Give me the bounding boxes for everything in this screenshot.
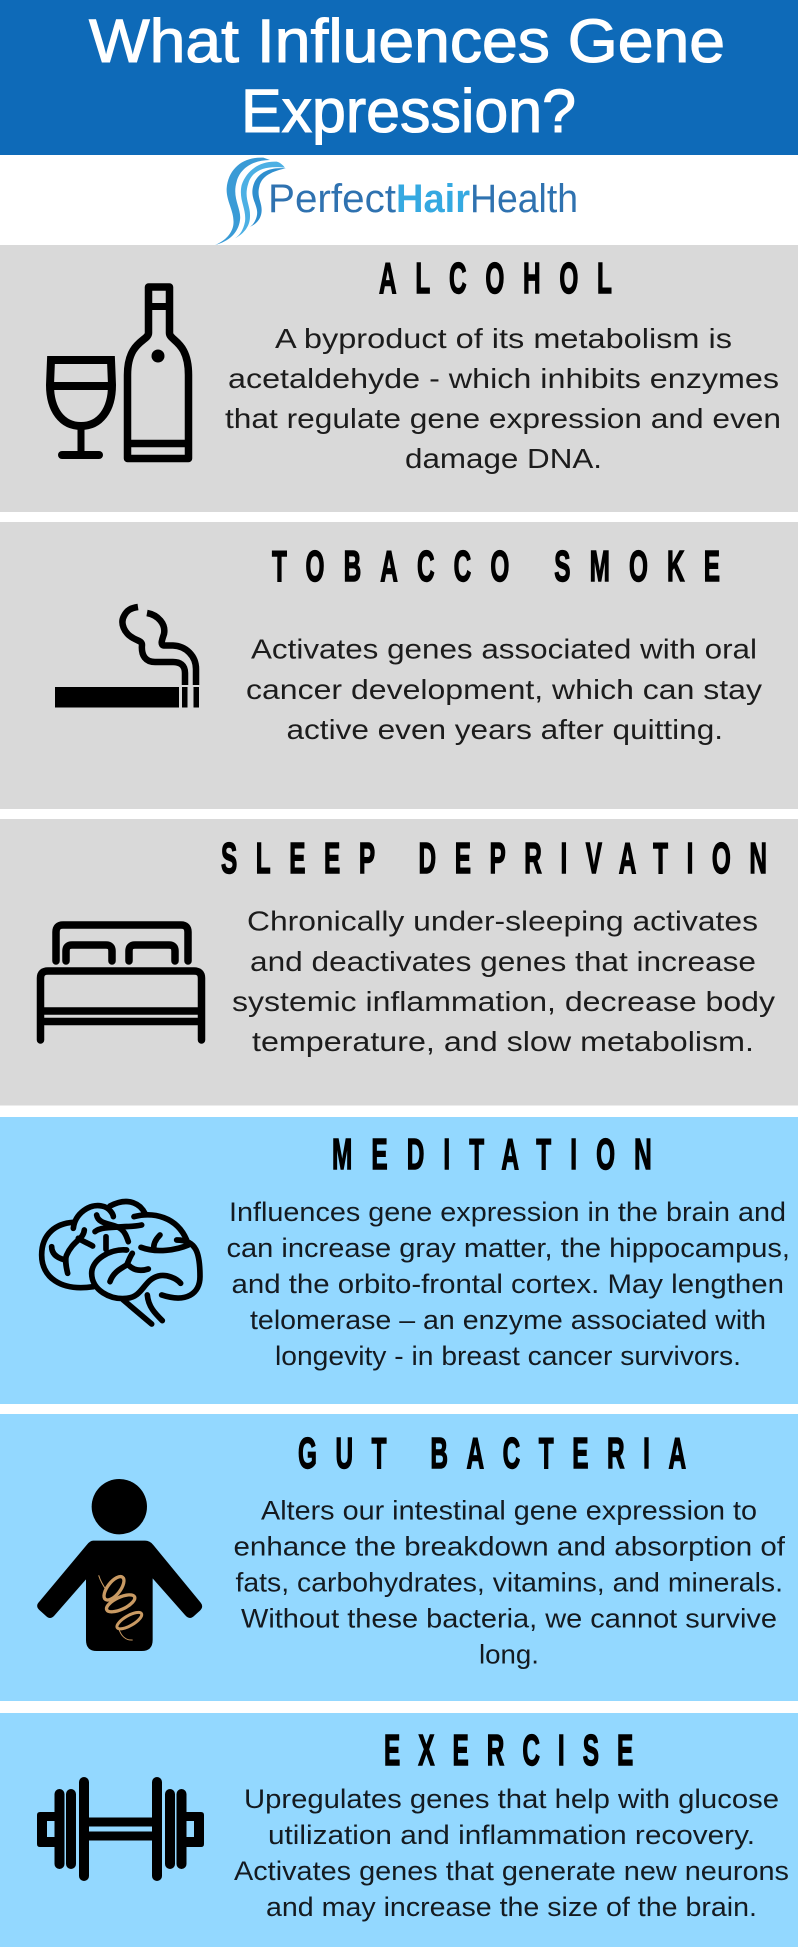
text block: meditation xyxy=(226,1197,790,1371)
text block: meditation: longevity - in breast cancer survivors. xyxy=(275,1341,741,1371)
text block: sleep deprivation: temperature, and slow metabolism. xyxy=(252,1026,754,1057)
text block: gut bacteria xyxy=(234,1496,786,1670)
panel: alcohol xyxy=(0,245,798,512)
text block: alcohol xyxy=(225,323,781,474)
text block: exercise: Upregulates genes that help with glucose xyxy=(244,1784,779,1814)
heading: alcohol: ALCOHOL xyxy=(379,255,612,303)
title xyxy=(89,7,725,145)
logo wordmark xyxy=(268,177,578,221)
text block: gut bacteria: enhance the breakdown and absorption of xyxy=(234,1532,786,1562)
icon: person with gut bacteria xyxy=(37,1479,202,1651)
icon: hair swoosh xyxy=(215,158,286,245)
text block: sleep deprivation: systemic inflammation, decrease body xyxy=(232,986,775,1017)
text block: gut bacteria: Without these bacteria, we cannot survive xyxy=(241,1604,777,1634)
text block: alcohol: that regulate gene expression and even xyxy=(225,403,781,434)
icon: bacterium xyxy=(99,1573,144,1640)
text block: gut bacteria: Alters our intestinal gene expression to xyxy=(261,1496,757,1526)
logo: Perfect Hair Health xyxy=(215,158,578,245)
text block: alcohol: A byproduct of its metabolism is xyxy=(275,323,732,354)
logo wordmark: Hair xyxy=(396,177,470,221)
header banner xyxy=(0,0,798,155)
text block: tobacco smoke: active even years after quitting. xyxy=(286,714,723,745)
panel: exercise xyxy=(0,1713,798,1947)
icon: bed xyxy=(40,925,202,1040)
panel: meditation xyxy=(0,1117,798,1404)
text block: gut bacteria: fats, carbohydrates, vitamins, and minerals. xyxy=(236,1568,783,1598)
text block: alcohol: acetaldehyde - which inhibits enzymes xyxy=(228,363,779,394)
text block: tobacco smoke: cancer development, which can stay xyxy=(246,674,762,705)
icon: brain xyxy=(42,1202,200,1324)
heading: sleep deprivation: SLEEP DEPRIVATION xyxy=(221,835,767,883)
icon: dumbbell xyxy=(37,1777,204,1881)
icon: wine glass and bottle xyxy=(50,287,189,458)
text block: meditation: and the orbito-frontal cortex. May lengthen xyxy=(232,1269,784,1299)
text block: tobacco smoke xyxy=(246,634,762,745)
heading: exercise: EXERCISE xyxy=(384,1727,633,1775)
text block: tobacco smoke: Activates genes associated with oral xyxy=(251,634,757,664)
title: Expression? xyxy=(241,77,576,145)
panel: sleep deprivation xyxy=(0,819,798,1106)
text block: sleep deprivation: and deactivates genes that increase xyxy=(250,946,756,977)
heading: tobacco smoke: TOBACCO SMOKE xyxy=(272,543,720,591)
text block: exercise xyxy=(234,1784,789,1922)
logo wordmark: Health xyxy=(470,177,578,221)
logo wordmark: Perfect xyxy=(268,177,396,221)
icon: cigarette xyxy=(55,607,199,708)
heading: meditation: MEDITATION xyxy=(332,1131,652,1179)
text block: exercise: utilization and inflammation recovery. xyxy=(268,1820,755,1850)
title: What Influences Gene xyxy=(89,7,725,75)
text block: exercise: and may increase the size of the brain. xyxy=(266,1892,757,1922)
text block: meditation: telomerase – an enzyme associated with xyxy=(250,1305,766,1335)
heading: gut bacteria: GUT BACTERIA xyxy=(298,1430,686,1478)
text block: exercise: Activates genes that generate new neurons xyxy=(234,1856,789,1886)
panel: tobacco smoke xyxy=(0,522,798,809)
text block: gut bacteria: long. xyxy=(479,1640,539,1670)
panel: gut bacteria xyxy=(0,1414,798,1701)
text block: meditation: Influences gene expression in the brain and xyxy=(229,1197,786,1227)
text block: sleep deprivation: Chronically under-sleeping activates xyxy=(247,906,758,936)
text block: alcohol: damage DNA. xyxy=(405,443,602,474)
text block: sleep deprivation xyxy=(232,906,775,1057)
text block: meditation: can increase gray matter, the hippocampus, xyxy=(226,1233,790,1263)
